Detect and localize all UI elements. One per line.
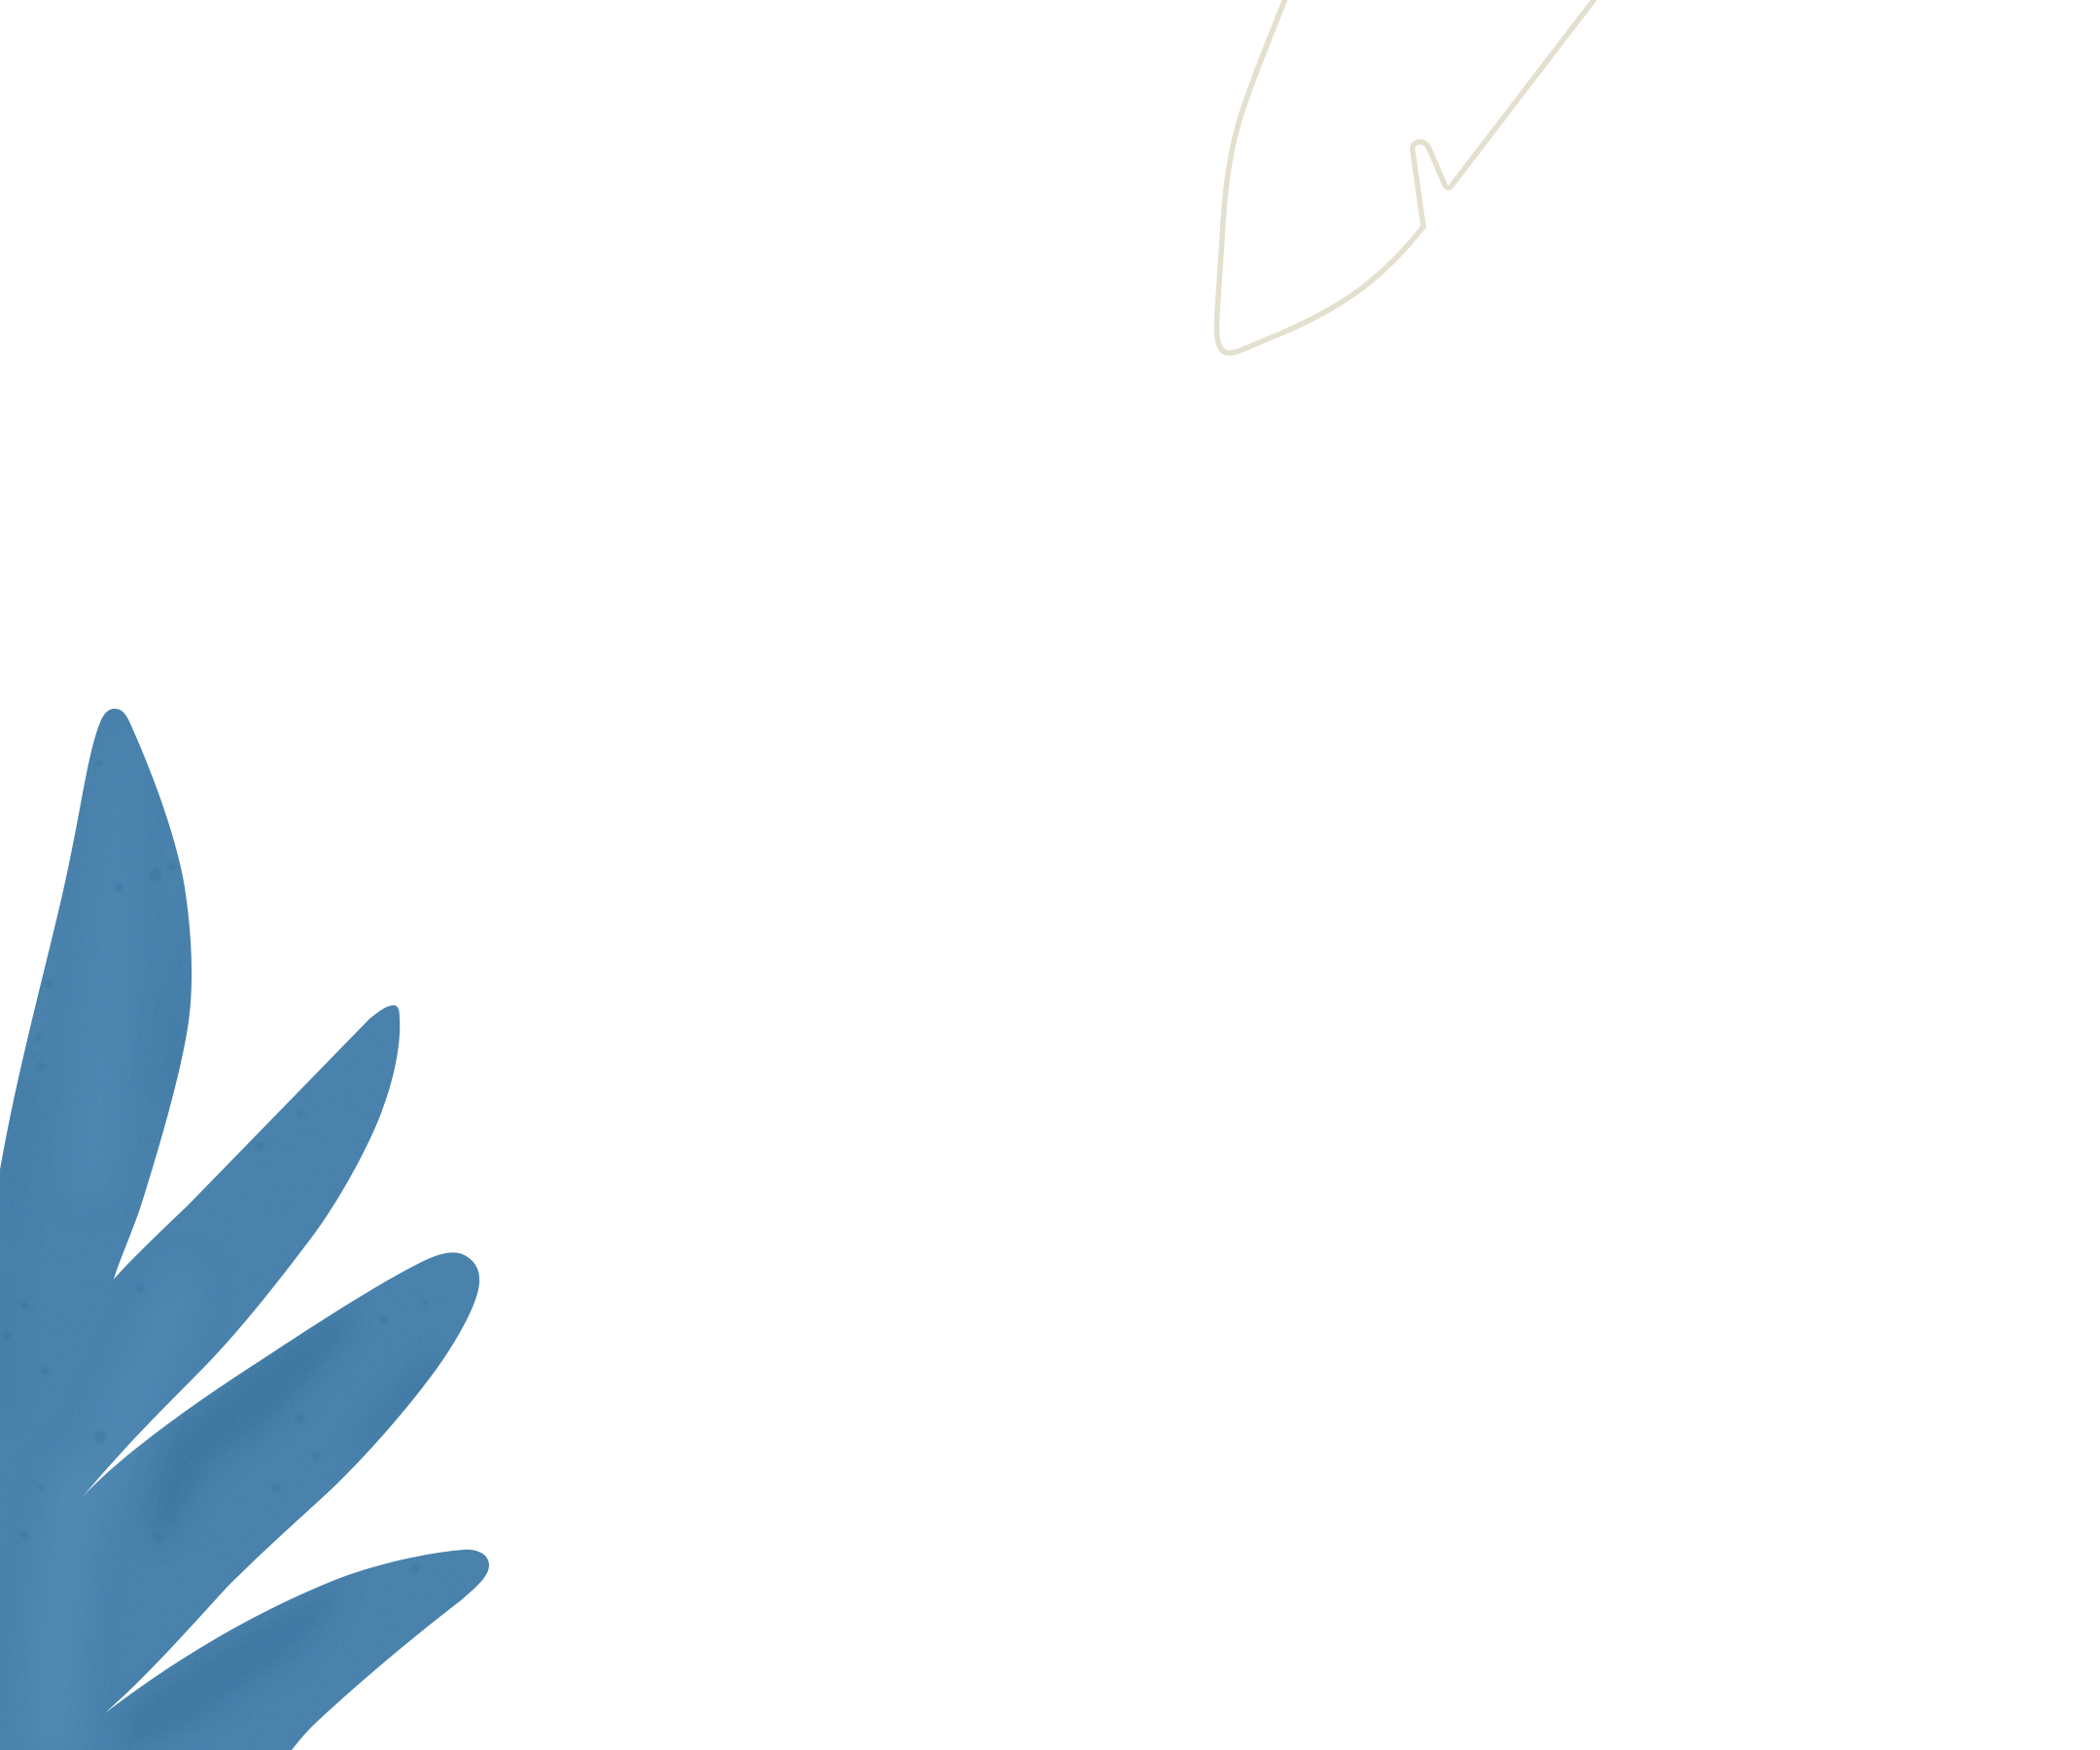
watercolor specks bbox=[6, 872, 386, 1534]
watercolor grain bbox=[0, 752, 472, 1749]
illustration: blue watercolor leaf at bottom left bbox=[0, 681, 525, 1750]
outline: beige leaf contour at top bbox=[1216, 0, 1594, 353]
